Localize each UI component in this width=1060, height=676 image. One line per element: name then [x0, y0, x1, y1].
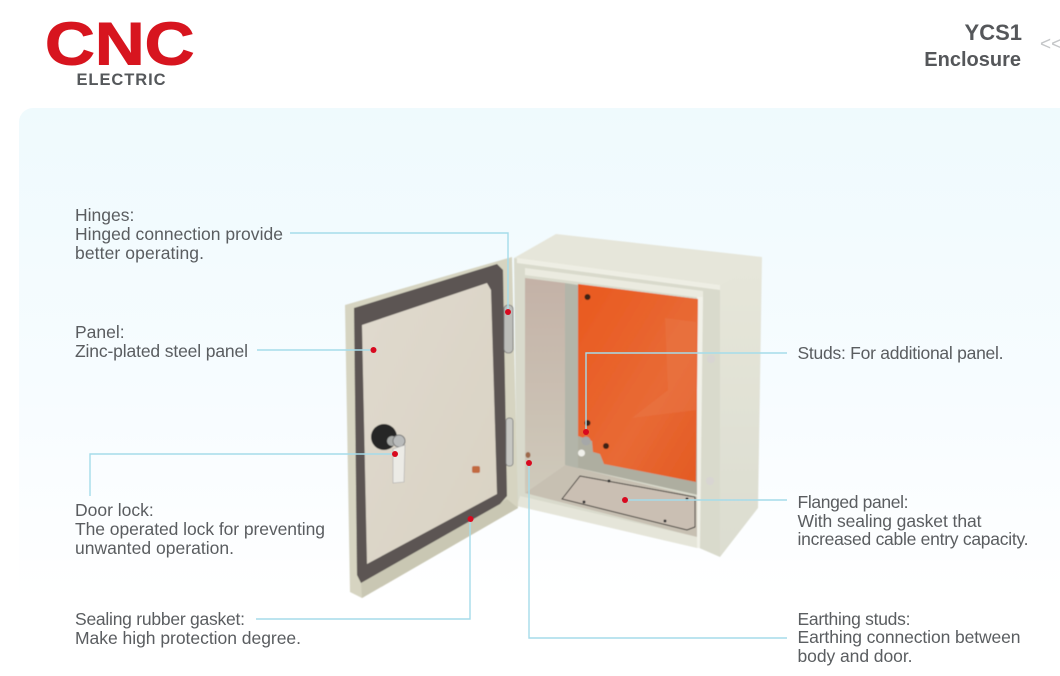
illustration: open enclosure [345, 234, 762, 598]
callout: hinges: Hinges: [75, 205, 134, 225]
callout: hinges [75, 205, 511, 315]
product title [924, 20, 1022, 71]
callout: earthing studs: body and door. [798, 646, 912, 666]
callout: studs [583, 343, 1004, 435]
product title: Enclosure [924, 49, 1021, 71]
copper stud [472, 466, 480, 473]
door lock [371, 424, 405, 483]
enclosure body [514, 234, 762, 557]
callout: flanged panel: With sealing gasket that [798, 511, 982, 531]
callout: studs: Studs: For additional panel. [798, 343, 1004, 363]
callout: flanged panel: Flanged panel: [798, 492, 908, 512]
callout: flanged panel [622, 492, 1028, 549]
door [345, 257, 518, 598]
callout: door lock: The operated lock for preventing [75, 519, 325, 539]
callout: sealing rubber gasket: Make high protection degree. [75, 628, 301, 648]
product title: YCS1 [965, 20, 1022, 45]
callout: hinges: better operating. [75, 243, 204, 263]
flanged bottom plate [562, 476, 695, 530]
callout: panel: Zinc-plated steel panel [75, 341, 248, 361]
logo: CNC Electric: ELECTRIC [76, 71, 166, 89]
callout: hinges: Hinged connection provide [75, 224, 283, 244]
callout: flanged panel: increased cable entry capacity. [798, 529, 1028, 549]
door hinges [504, 305, 513, 466]
callout: earthing studs: Earthing connection between [798, 627, 1020, 647]
callout: door lock: unwanted operation. [75, 538, 234, 558]
callout: panel [75, 322, 376, 361]
callout: panel: Panel: [75, 322, 125, 342]
callout: sealing rubber gasket: Sealing rubber gasket: [75, 609, 245, 629]
callout: earthing studs [526, 460, 1020, 666]
callout: door lock [75, 451, 398, 558]
logo: CNC Electric: CNC [45, 9, 194, 78]
callout: earthing studs: Earthing studs: [798, 609, 910, 629]
callout: sealing rubber gasket [75, 516, 474, 648]
callout: door lock: Door lock: [75, 500, 154, 520]
orange mounting plate [578, 284, 698, 482]
